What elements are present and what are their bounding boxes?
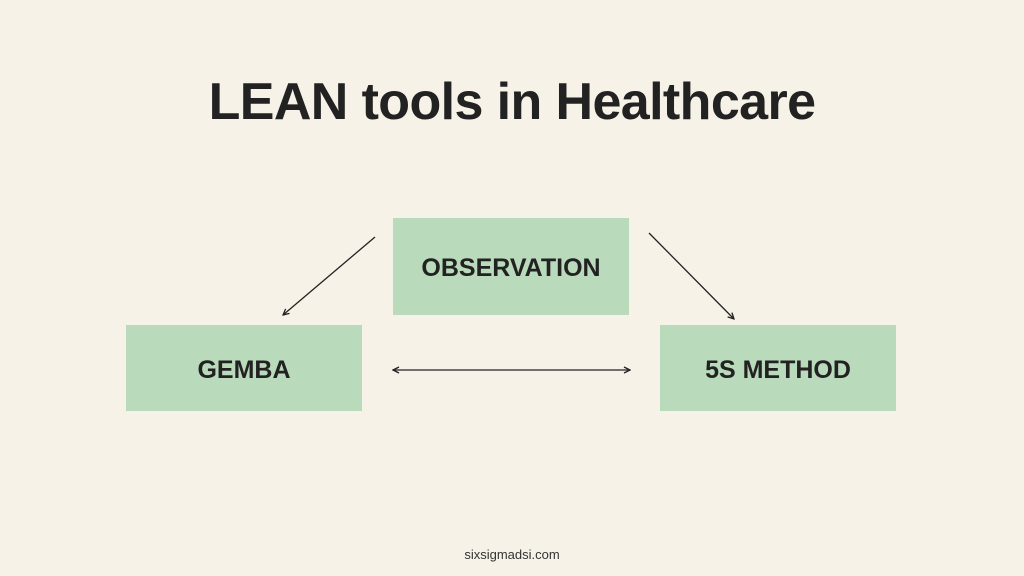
box: observation: OBSERVATION: [421, 254, 601, 282]
arrow: gemba to 5s double: [393, 369, 630, 371]
arrow: observation to gemba: [283, 237, 375, 315]
box: observation: [393, 218, 629, 315]
arrow: observation to 5s: [649, 233, 734, 319]
footer: sixsigmadsi.com: [464, 547, 560, 562]
box: gemba: GEMBA: [197, 356, 291, 384]
box: 5s method: [660, 325, 896, 411]
title: LEAN tools in Healthcare: [209, 73, 815, 131]
box: gemba: [126, 325, 362, 411]
box: 5s method: 5S METHOD: [705, 356, 851, 384]
